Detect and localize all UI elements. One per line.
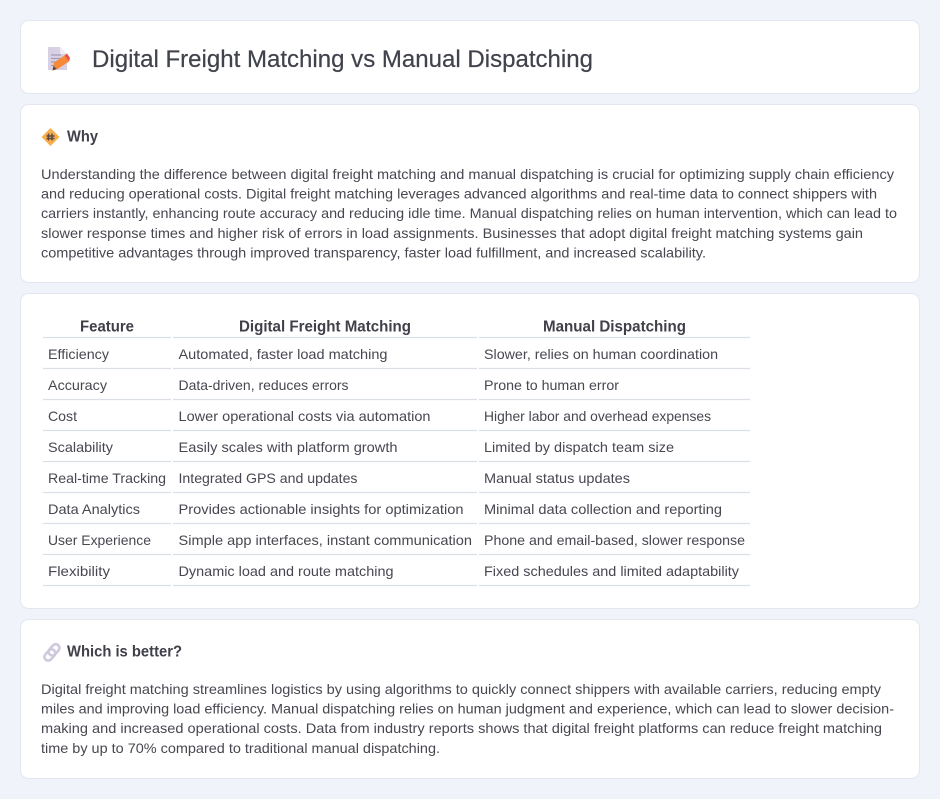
row: real-time tracking: Integrated GPS and updates: [178, 470, 358, 486]
row: data analytics: [48, 501, 722, 517]
text block: verdict paragraph: miles and improving load efficiency. Manual dispatching relies on human judgment and experience, which can lead to slower decision-: [41, 701, 894, 717]
row: user experience: Phone and email-based, slower response: [484, 532, 745, 548]
row: data analytics: Data Analytics: [48, 501, 140, 517]
text block: verdict paragraph: Digital freight matching streamlines logistics by using algorithms to quickly connect shippers with available carriers, reducing empty: [41, 681, 881, 697]
row: user experience: User Experience: [48, 532, 151, 548]
row: scalability: Limited by dispatch team size: [484, 439, 674, 455]
table header: Digital Freight Matching: [239, 318, 411, 336]
row: efficiency: [48, 346, 718, 362]
row: accuracy: Data-driven, reduces errors: [178, 377, 348, 393]
row: flexibility: Flexibility: [48, 563, 110, 579]
row: cost: [48, 408, 711, 424]
row: cost: Lower operational costs via automation: [178, 408, 430, 424]
table header: Manual Dispatching: [543, 318, 686, 336]
row: flexibility: Dynamic load and route matching: [178, 563, 394, 579]
heading: why: Why: [67, 128, 98, 146]
row: efficiency: Slower, relies on human coordination: [484, 346, 718, 362]
text block: why paragraph: [41, 166, 897, 260]
row: real-time tracking: Manual status updates: [484, 470, 630, 486]
row: flexibility: [48, 563, 739, 579]
row: efficiency: Efficiency: [48, 346, 109, 362]
header panel: [20, 20, 920, 94]
heading: which is better: Which is better?: [67, 644, 182, 660]
row: scalability: [48, 439, 674, 455]
row: scalability: Scalability: [48, 439, 113, 455]
text block: why paragraph: slower response times and higher risk of errors in load assignments. Businesses that adopt digital freight matching systems gain: [41, 225, 863, 241]
text block: verdict paragraph: [41, 681, 894, 756]
icon: chain link: [43, 643, 61, 662]
table header: [80, 318, 686, 336]
row: accuracy: [48, 377, 619, 393]
row: user experience: [48, 532, 745, 548]
row: cost: Higher labor and overhead expenses: [484, 408, 711, 424]
text block: why paragraph: Understanding the difference between digital freight matching and manual dispatching is crucial for optimizing supply chain efficiency: [41, 166, 894, 182]
text block: why paragraph: competitive advantages through improved transparency, faster load fulfillment, and increased scalability.: [41, 244, 706, 260]
row: cost: Cost: [48, 408, 77, 424]
icon: document with pencil: [48, 47, 70, 70]
text block: why paragraph: carriers instantly, enhancing route accuracy and reducing idle time. Manual dispatching relies on human intervention, which can lead to: [41, 205, 897, 221]
icon: warning diamond: [42, 129, 58, 145]
row: data analytics: Provides actionable insights for optimization: [178, 501, 464, 517]
row: scalability: Easily scales with platform growth: [178, 439, 398, 455]
row: real-time tracking: Real-time Tracking: [48, 470, 166, 486]
row: flexibility: Fixed schedules and limited adaptability: [484, 563, 739, 579]
panel: why: [20, 104, 920, 282]
text block: why paragraph: and reducing operational costs. Digital freight matching leverages advanced algorithms and real-time data to connect shippers with: [41, 186, 877, 202]
row: data analytics: Minimal data collection and reporting: [484, 501, 722, 517]
row: user experience: Simple app interfaces, instant communication: [178, 532, 472, 548]
row: accuracy: Accuracy: [48, 377, 107, 393]
table header: Feature: [80, 318, 134, 336]
text block: verdict paragraph: making and increased operational costs. Data from industry reports shows that digital freight platforms can reduce freight matching: [41, 720, 882, 736]
row: accuracy: Prone to human error: [484, 377, 619, 393]
title: Digital Freight Matching vs Manual Dispatching: [92, 46, 593, 73]
panel: which is better: [20, 620, 920, 778]
row: real-time tracking: [48, 470, 630, 486]
panel: comparison table: [20, 294, 920, 608]
row: efficiency: Automated, faster load matching: [178, 346, 388, 362]
text block: verdict paragraph: time by up to 70% compared to traditional manual dispatching.: [41, 740, 440, 756]
